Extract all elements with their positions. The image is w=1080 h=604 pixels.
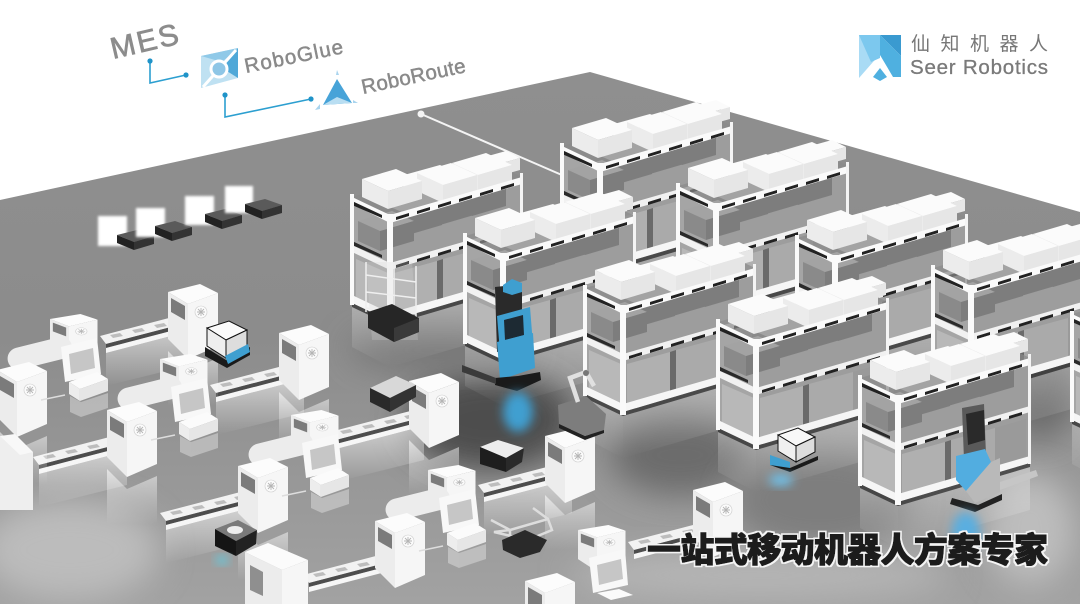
tower 4 <box>545 428 595 550</box>
small AGVs parked in a row <box>98 186 282 250</box>
blue reflection under second forklift <box>952 512 980 552</box>
blue forklift robot <box>462 279 541 391</box>
shelf 7 <box>583 242 756 458</box>
Chinese company name: 仙知机器人 <box>911 29 1048 56</box>
MES label: MES <box>107 18 182 66</box>
second blue forklift robot <box>950 404 1038 512</box>
RoboRoute label: RoboRoute <box>359 54 468 99</box>
icon: Seer logo mark <box>859 35 901 81</box>
icon: RoboRoute <box>315 70 358 110</box>
shelf 8 <box>1070 268 1080 484</box>
shelf 1 <box>560 100 733 316</box>
belt 2 <box>210 362 304 435</box>
tower 3 <box>409 373 459 495</box>
English company name: Seer Robotics <box>910 56 1048 79</box>
leader line from scheduling software to floor <box>418 110 578 182</box>
storage shelf rows <box>350 100 1080 548</box>
tower 1 <box>168 284 218 406</box>
edge machine left <box>0 434 33 510</box>
station 4 <box>375 465 486 588</box>
belt 5 <box>160 490 254 563</box>
AGV 4 <box>225 186 282 219</box>
AGV 1 <box>98 216 154 250</box>
belt 3 <box>33 434 127 507</box>
rack-carrying robot <box>366 262 419 342</box>
tower 5 <box>693 482 743 557</box>
RoboGlue label: RoboGlue <box>242 35 345 78</box>
shelf 5 <box>795 192 968 408</box>
shelf 9 <box>716 276 889 492</box>
screen machine bottom <box>245 543 308 604</box>
software stack labels <box>107 18 468 117</box>
AGV 3 <box>185 196 242 229</box>
robot arm on mobile base <box>558 370 606 440</box>
AGV black with cover <box>480 440 524 472</box>
belt 1 <box>100 313 194 386</box>
blue AGV with white cage <box>769 428 818 486</box>
AGV with white cargo <box>370 376 416 412</box>
connector RoboGlue to RoboRoute <box>222 92 314 117</box>
shelf 6 <box>931 222 1080 438</box>
connector MES to RoboGlue <box>147 58 189 83</box>
station 5 <box>525 525 633 604</box>
icon: RoboGlue <box>201 48 238 88</box>
blue reflection under forklift <box>503 392 533 432</box>
Seer Robotics logo <box>859 29 1048 81</box>
shelf 4 <box>463 190 636 406</box>
belt 7 <box>303 552 397 592</box>
AGV round white top <box>215 520 257 564</box>
AGV with frame <box>491 508 552 558</box>
AGV with cage on blue base <box>205 321 250 368</box>
shelf 3 <box>676 140 849 356</box>
station 1 <box>0 314 108 484</box>
belt 6 <box>478 462 572 535</box>
shelf 2 <box>350 151 523 367</box>
station 3 <box>238 410 349 580</box>
floor reflections <box>0 300 1080 600</box>
belt 8 <box>628 519 722 559</box>
belt 4 <box>330 409 424 482</box>
station 2 <box>107 354 218 524</box>
tagline: 一站式移动机器人方案专家 <box>647 523 1048 572</box>
shelf 10 <box>858 332 1031 548</box>
AGV 2 <box>136 208 192 241</box>
tower 2 <box>279 325 329 447</box>
conveyor lines <box>0 284 743 604</box>
